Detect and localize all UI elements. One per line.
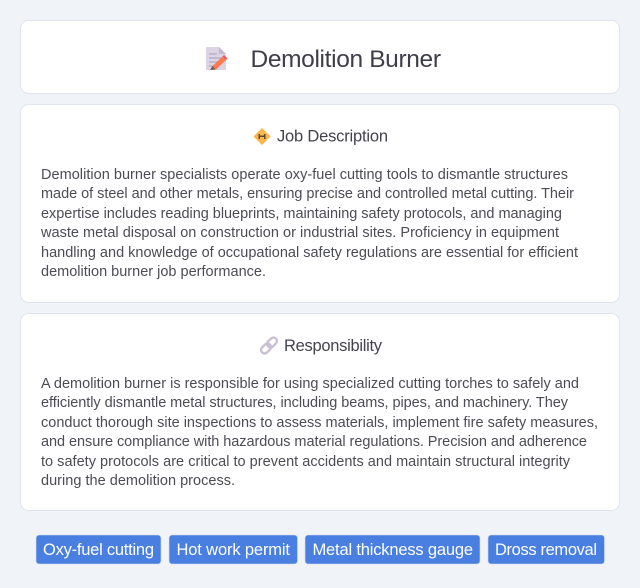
text block: job description: Demolition burner specialists operate oxy-fuel cutting tools to dismantle structures xyxy=(41,167,568,183)
text block: job description: expertise includes reading blueprints, maintaining safety protocols, and managing xyxy=(41,206,562,222)
tag: hot work permit xyxy=(169,535,298,564)
tag: hot work permit: Hot work permit xyxy=(176,541,290,559)
panel: title card xyxy=(20,20,620,94)
text block: job description: made of steel and other metals, ensuring precise and controlled metal cutting. Their xyxy=(41,186,574,202)
tag: metal thickness gauge: Metal thickness gauge xyxy=(312,541,473,559)
text block: job description: waste metal disposal on construction or industrial sites. Proficiency in equipment xyxy=(40,225,559,241)
tag: dross removal xyxy=(488,535,604,564)
icon: document with pencil xyxy=(206,47,228,70)
icon: chain link xyxy=(260,336,278,355)
title: Demolition Burner xyxy=(250,46,441,73)
heading: responsibility: Responsibility xyxy=(284,337,383,355)
text block: job description: demolition burner job performance. xyxy=(41,264,266,280)
tag: dross removal: Dross removal xyxy=(495,541,597,559)
panel: job description xyxy=(20,104,620,302)
text block: responsibility: and ensure compliance with hazardous material regulations. Precision and adherence xyxy=(41,434,587,450)
icon: construction diamond xyxy=(254,128,270,145)
text block: responsibility: A demolition burner is responsible for using specialized cutting torches to safely and xyxy=(41,376,579,392)
tag: metal thickness gauge xyxy=(305,535,480,564)
tag: oxy-fuel cutting: Oxy-fuel cutting xyxy=(43,541,154,559)
text block: responsibility: to safety protocols are critical to prevent accidents and maintain structural integrity xyxy=(41,454,571,470)
text block: job description: handling and knowledge of occupational safety regulations are essential for efficient xyxy=(41,245,578,261)
text block: job description xyxy=(40,167,578,280)
text block: responsibility: efficiently dismantle metal structures, including beams, pipes, and machinery. They xyxy=(41,395,569,411)
heading: job description: Job Description xyxy=(277,128,388,146)
text block: responsibility: during the demolition process. xyxy=(41,473,235,489)
tag: oxy-fuel cutting xyxy=(36,535,161,564)
text block: responsibility xyxy=(41,376,598,489)
panel: responsibility xyxy=(20,314,620,510)
text block: responsibility: conduct thorough site inspections to assess materials, implement fire safety measures, xyxy=(41,415,598,431)
